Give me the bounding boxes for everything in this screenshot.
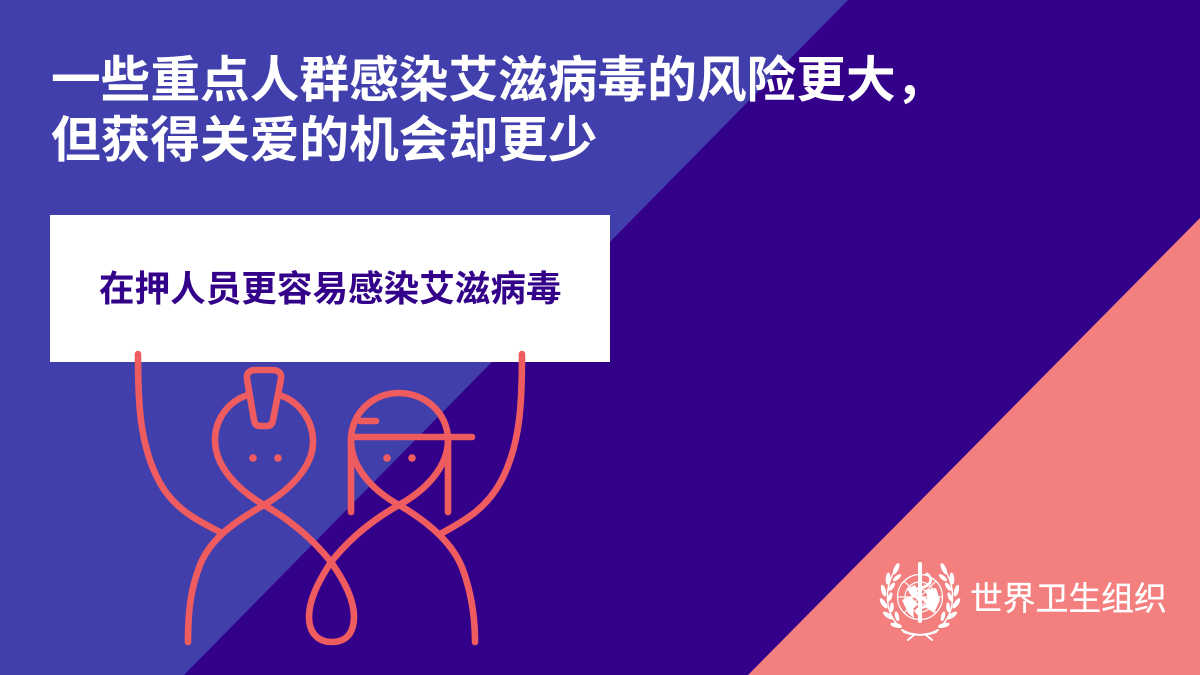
ribbon at wreath base — [902, 630, 938, 640]
globe — [898, 574, 942, 620]
continents — [902, 585, 940, 618]
hair and fringe — [351, 421, 472, 512]
crossed lower bodies and loop — [264, 505, 399, 642]
staff and serpent — [912, 564, 931, 621]
left arm — [138, 354, 222, 533]
right person head and body — [351, 393, 475, 642]
mohawk — [247, 370, 281, 426]
placard text: 在押人员更容易感染艾滋病毒 — [99, 269, 562, 309]
eyes — [249, 454, 416, 462]
right arm — [442, 354, 522, 533]
title: 但获得关爱的机会却更少 — [51, 112, 598, 168]
left person head and body — [188, 395, 264, 642]
WHO emblem — [880, 562, 960, 641]
WHO name: 世界卫生组织 — [970, 580, 1167, 617]
title: 一些重点人群感染艾滋病毒的风险更大， — [51, 52, 945, 108]
laurel wreath, left branch — [878, 562, 903, 629]
title — [51, 52, 945, 168]
placard panel — [50, 215, 610, 362]
laurel wreath, right branch — [937, 562, 962, 629]
